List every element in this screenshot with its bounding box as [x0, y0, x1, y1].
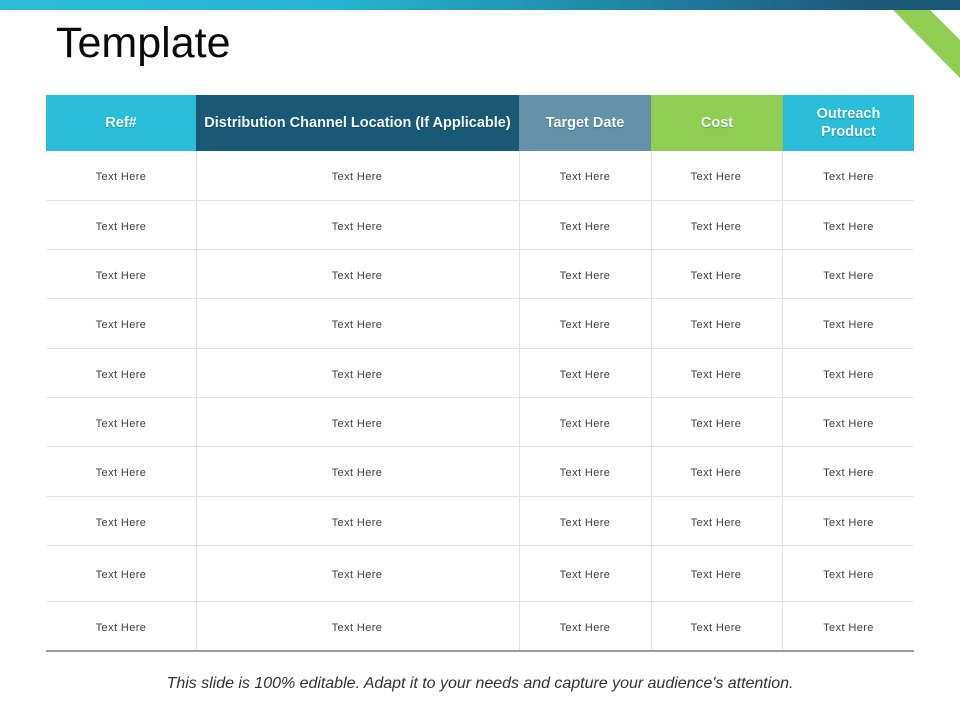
row 3: Text Here — [332, 270, 382, 282]
row 4: Text Here — [96, 318, 146, 330]
header: Outreach Product: Outreach — [817, 106, 880, 122]
row 6: Text Here — [96, 418, 146, 430]
row 3: Text Here — [560, 270, 610, 282]
header: Ref#: Ref# — [105, 115, 137, 131]
row 1: Text Here — [560, 170, 610, 182]
row 1: Text Here — [823, 170, 874, 182]
header: Distribution Channel Location: Distribution Channel Location (If Applicable) — [204, 115, 511, 131]
row 1 — [46, 151, 914, 201]
row 3 — [46, 250, 914, 299]
row 9 — [46, 546, 914, 602]
row 8: Text Here — [560, 517, 610, 529]
row 9: Text Here — [96, 568, 146, 580]
row 10: Text Here — [823, 622, 874, 634]
row 4 — [46, 299, 914, 349]
row 5: Text Here — [332, 369, 382, 381]
header: Cost — [651, 95, 783, 151]
header: Target Date — [519, 95, 651, 151]
row 1: Text Here — [96, 170, 146, 182]
row 9: Text Here — [691, 568, 741, 580]
header: Outreach Product: Product — [821, 124, 876, 140]
row 7: Text Here — [823, 466, 874, 478]
row 2: Text Here — [332, 221, 382, 233]
row 6: Text Here — [332, 418, 382, 430]
row 8: Text Here — [96, 517, 146, 529]
row 8: Text Here — [332, 517, 382, 529]
row 6: Text Here — [691, 418, 741, 430]
top gradient bar — [0, 0, 960, 10]
row 4: Text Here — [691, 318, 741, 330]
row 6 — [46, 398, 914, 447]
row 8: Text Here — [823, 517, 874, 529]
row 6: Text Here — [823, 418, 874, 430]
title: Template — [56, 19, 230, 67]
row 8: Text Here — [691, 517, 741, 529]
row 10: Text Here — [96, 622, 146, 634]
row 10: Text Here — [560, 622, 610, 634]
row 1: Text Here — [691, 170, 741, 182]
row 4: Text Here — [560, 318, 610, 330]
row 5: Text Here — [96, 369, 146, 381]
footer note: This slide is 100% editable. Adapt it to your needs and capture your audience's attention. — [167, 675, 793, 692]
row 6: Text Here — [560, 418, 610, 430]
header: Distribution Channel Location — [196, 95, 519, 151]
row 1: Text Here — [332, 170, 382, 182]
row 3: Text Here — [823, 270, 874, 282]
row 4: Text Here — [823, 318, 874, 330]
header: Outreach Product — [783, 95, 914, 151]
row 10: Text Here — [691, 622, 741, 634]
header: Cost: Cost — [701, 115, 733, 131]
row 7: Text Here — [96, 466, 146, 478]
row 2: Text Here — [691, 221, 741, 233]
header row — [46, 95, 914, 151]
row 9: Text Here — [823, 568, 874, 580]
row 8 — [46, 497, 914, 546]
row 7: Text Here — [560, 466, 610, 478]
row 5 — [46, 349, 914, 398]
row 7 — [46, 447, 914, 497]
row 4: Text Here — [332, 318, 382, 330]
row 7: Text Here — [332, 466, 382, 478]
row 10: Text Here — [332, 622, 382, 634]
header: Ref# — [46, 95, 196, 151]
row 3: Text Here — [96, 270, 146, 282]
row 7: Text Here — [691, 466, 741, 478]
table — [46, 95, 914, 652]
row 5: Text Here — [691, 369, 741, 381]
row 9: Text Here — [560, 568, 610, 580]
row 5: Text Here — [560, 369, 610, 381]
row 9: Text Here — [332, 568, 382, 580]
row 2 — [46, 201, 914, 250]
row 3: Text Here — [691, 270, 741, 282]
row 10 — [46, 602, 914, 652]
row 2: Text Here — [96, 221, 146, 233]
row 2: Text Here — [560, 221, 610, 233]
row 5: Text Here — [823, 369, 874, 381]
header: Target Date: Target Date — [546, 115, 624, 131]
row 2: Text Here — [823, 221, 874, 233]
